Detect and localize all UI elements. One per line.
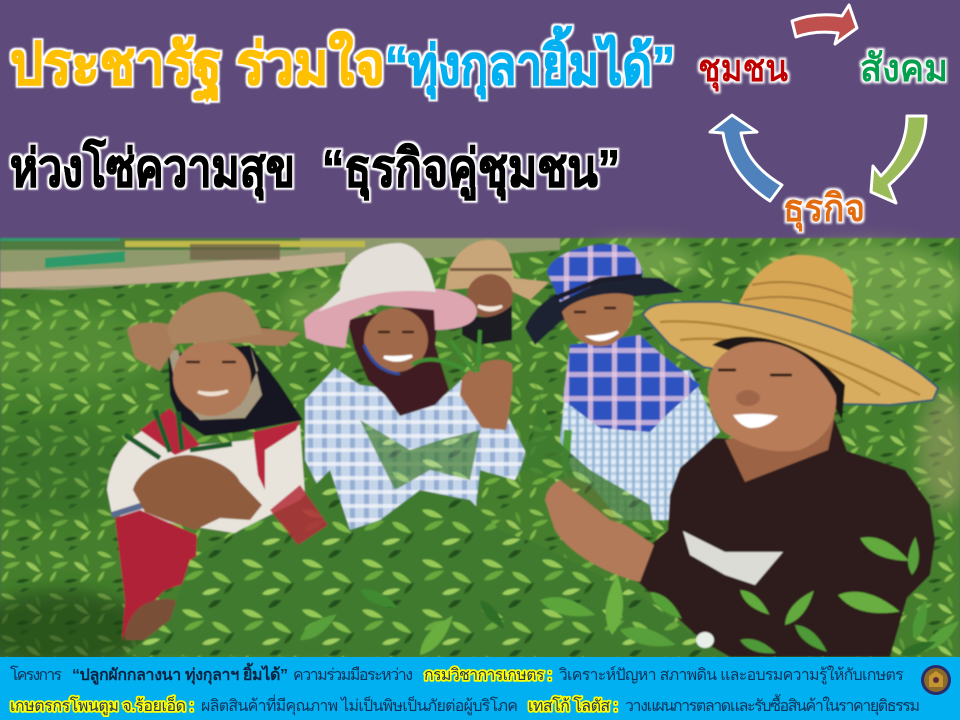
face	[708, 342, 836, 451]
footer text line two: เทสโก้ โลตัส :	[528, 696, 618, 715]
foreground pepper plants	[125, 370, 960, 660]
sweater	[637, 420, 935, 657]
face	[562, 293, 634, 346]
footer text line one: โครงการ	[10, 665, 62, 684]
hat brim	[643, 302, 938, 405]
farmer 1: left	[107, 292, 305, 640]
hat crown	[167, 292, 262, 344]
footer text line two: เกษตรกรโพนตูม จ.ร้อยเอ็ด :	[10, 695, 194, 716]
black scarf	[168, 345, 303, 436]
large leaves	[296, 609, 340, 645]
chili held	[565, 430, 568, 470]
cycle diagram	[698, 5, 948, 232]
foliage tone variations	[0, 240, 960, 670]
farmer 2: white hat	[304, 243, 527, 565]
raised hand	[460, 360, 513, 430]
label: society: สังคม	[860, 48, 948, 90]
footer text line two	[10, 694, 920, 716]
maroon scarf	[347, 300, 449, 416]
foliage background	[0, 238, 960, 658]
red jacket panels	[140, 408, 300, 490]
scarf	[563, 335, 700, 432]
title line two: “ธุรกิจคู่ชุมชน”	[322, 140, 620, 201]
footer text line one: “ปลูกผักกลางนา ทุ่งกุลาฯ ยิ้มได้”	[72, 662, 288, 686]
title line two	[10, 137, 620, 201]
hat crown	[737, 255, 853, 335]
footer text line one: กรมวิชาการเกษตร :	[424, 667, 552, 684]
shirt	[305, 365, 527, 565]
distant soil and nets	[0, 238, 560, 290]
chili held	[125, 410, 232, 458]
footer text line one: วิเคราะห์ปัญหา สภาพดิน และอบรมความรู้ให้กับเกษตร	[559, 665, 904, 685]
farmer 4: blue plaid	[525, 244, 720, 520]
neck	[725, 415, 835, 482]
photo: farmers in chili field	[0, 238, 960, 670]
face	[173, 340, 251, 416]
label: community: ชุมชน	[698, 48, 788, 92]
footer text line one: ความร่วมมือระหว่าง	[293, 666, 413, 684]
title line two: ห่วงโซ่ความสุข	[10, 137, 295, 201]
face	[364, 308, 428, 372]
label: business: ธุรกิจ	[783, 188, 865, 232]
icon: ministry seal	[921, 665, 951, 695]
title: orange phrase: ประชารัฐ ร่วมใจ	[10, 30, 385, 102]
footer text line one	[10, 662, 904, 686]
farmer 3: back	[445, 240, 549, 345]
title: blue phrase: “ทุ่งกุลายิ้มได้”	[385, 26, 675, 100]
hat brim	[304, 288, 477, 348]
torso white	[107, 420, 305, 540]
legs	[125, 599, 205, 640]
footer panel	[0, 657, 960, 720]
hat brim	[127, 323, 300, 371]
red sleeve	[115, 510, 197, 640]
arrow: red community to society	[792, 5, 857, 44]
white stripe	[683, 531, 783, 585]
header panel background	[0, 0, 960, 238]
title line one	[10, 26, 675, 102]
hat crown	[318, 243, 436, 312]
hat crown	[547, 244, 643, 302]
hat brim	[525, 276, 684, 345]
hand	[545, 478, 654, 582]
arrow: green society to business	[871, 116, 926, 203]
hair	[712, 337, 845, 420]
footer text line two: ผลิตสินค้าที่มีคุณภาพ ไม่เป็นพิษเป็นภัยต่อผู้บริโภค	[201, 694, 518, 716]
arrow: blue business to community	[710, 115, 782, 201]
footer text line two: วางแผนการตลาดและรับซื้อสินค้าในราคายุติธรรม	[625, 694, 920, 716]
shirt	[560, 370, 720, 520]
chili held	[412, 330, 480, 372]
hands	[133, 455, 262, 530]
farmer 5: front right	[545, 255, 938, 657]
